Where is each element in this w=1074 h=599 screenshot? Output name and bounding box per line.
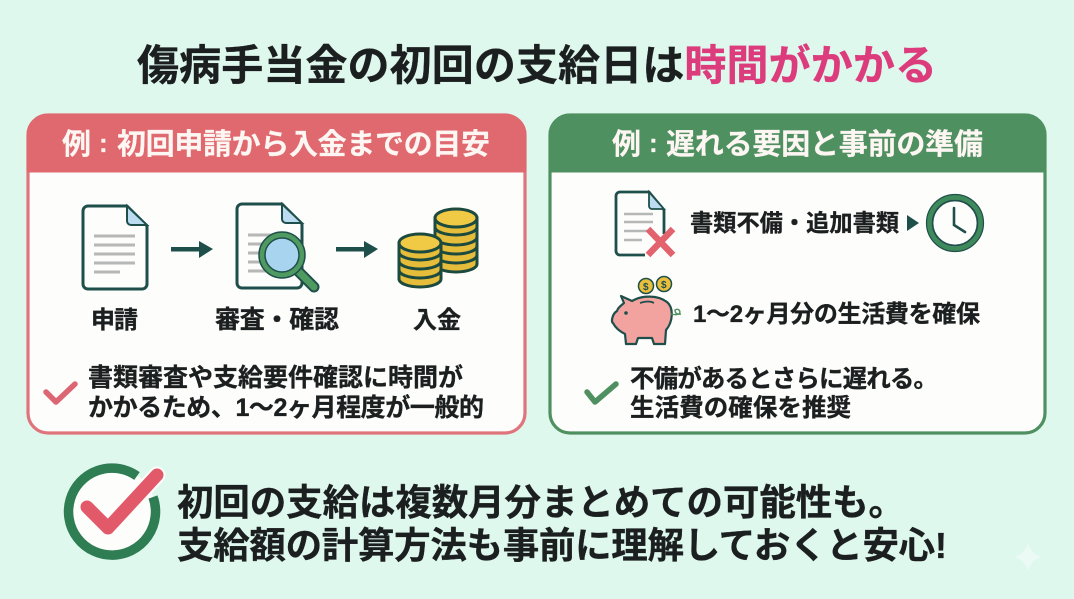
panel heading: causes: : bbox=[649, 128, 658, 158]
panel heading: timeline: 例 bbox=[62, 128, 91, 161]
note: timeline bbox=[88, 363, 484, 422]
summary text: 支給額の計算方法も事前に理解しておくと安心! bbox=[177, 525, 947, 566]
summary text: 初回の支給は複数月分まとめての可能性も。 bbox=[177, 482, 905, 523]
icon: sparkle bbox=[1014, 543, 1042, 571]
arrow: review to deposit bbox=[336, 241, 378, 258]
arrow: application to review bbox=[171, 241, 213, 258]
icon: piggy bank: $ bbox=[643, 282, 649, 293]
step label: application: 申請 bbox=[91, 307, 138, 334]
panel heading: timeline: 初回申請から入金までの目安 bbox=[117, 128, 490, 161]
panel heading: causes: 遅れる要因と事前の準備 bbox=[666, 128, 983, 161]
summary text bbox=[177, 482, 947, 566]
preparation text: 1～2ヶ月分の生活費を確保 bbox=[693, 301, 980, 328]
cause text: 書類不備・追加書類 bbox=[690, 210, 899, 236]
panel heading: timeline: : bbox=[99, 128, 108, 158]
icon: document with error mark bbox=[616, 192, 673, 255]
note: timeline: かかるため、1～2ヶ月程度が一般的 bbox=[88, 393, 484, 422]
icon: clock bbox=[926, 194, 984, 252]
step label: review: 審査・確認 bbox=[215, 306, 339, 334]
note: preparation: 生活費の確保を推奨 bbox=[630, 394, 851, 422]
arrow: cause to delay bbox=[907, 215, 919, 231]
icon: large check badge bbox=[68, 467, 157, 555]
icon: coin stacks bbox=[399, 209, 477, 287]
icon: pink check bbox=[46, 384, 75, 402]
note: timeline: 書類審査や支給要件確認に時間が bbox=[88, 363, 463, 392]
panel heading: causes: 例 bbox=[612, 128, 641, 161]
icon: piggy bank: $ bbox=[661, 280, 667, 291]
icon: piggy bank bbox=[612, 276, 681, 344]
icon: application document bbox=[83, 206, 147, 289]
icon: document with magnifier bbox=[237, 204, 314, 288]
title: 傷病手当金の初回の支給日は時間がかかる bbox=[137, 42, 937, 89]
note: preparation: 不備があるとさらに遅れる。 bbox=[630, 364, 938, 393]
note: preparation bbox=[630, 364, 938, 422]
panel: delay causes and preparation bbox=[550, 115, 1045, 433]
panel: application timeline bbox=[28, 115, 525, 433]
step label: deposit: 入金 bbox=[413, 307, 461, 334]
icon: green check bbox=[587, 384, 616, 402]
